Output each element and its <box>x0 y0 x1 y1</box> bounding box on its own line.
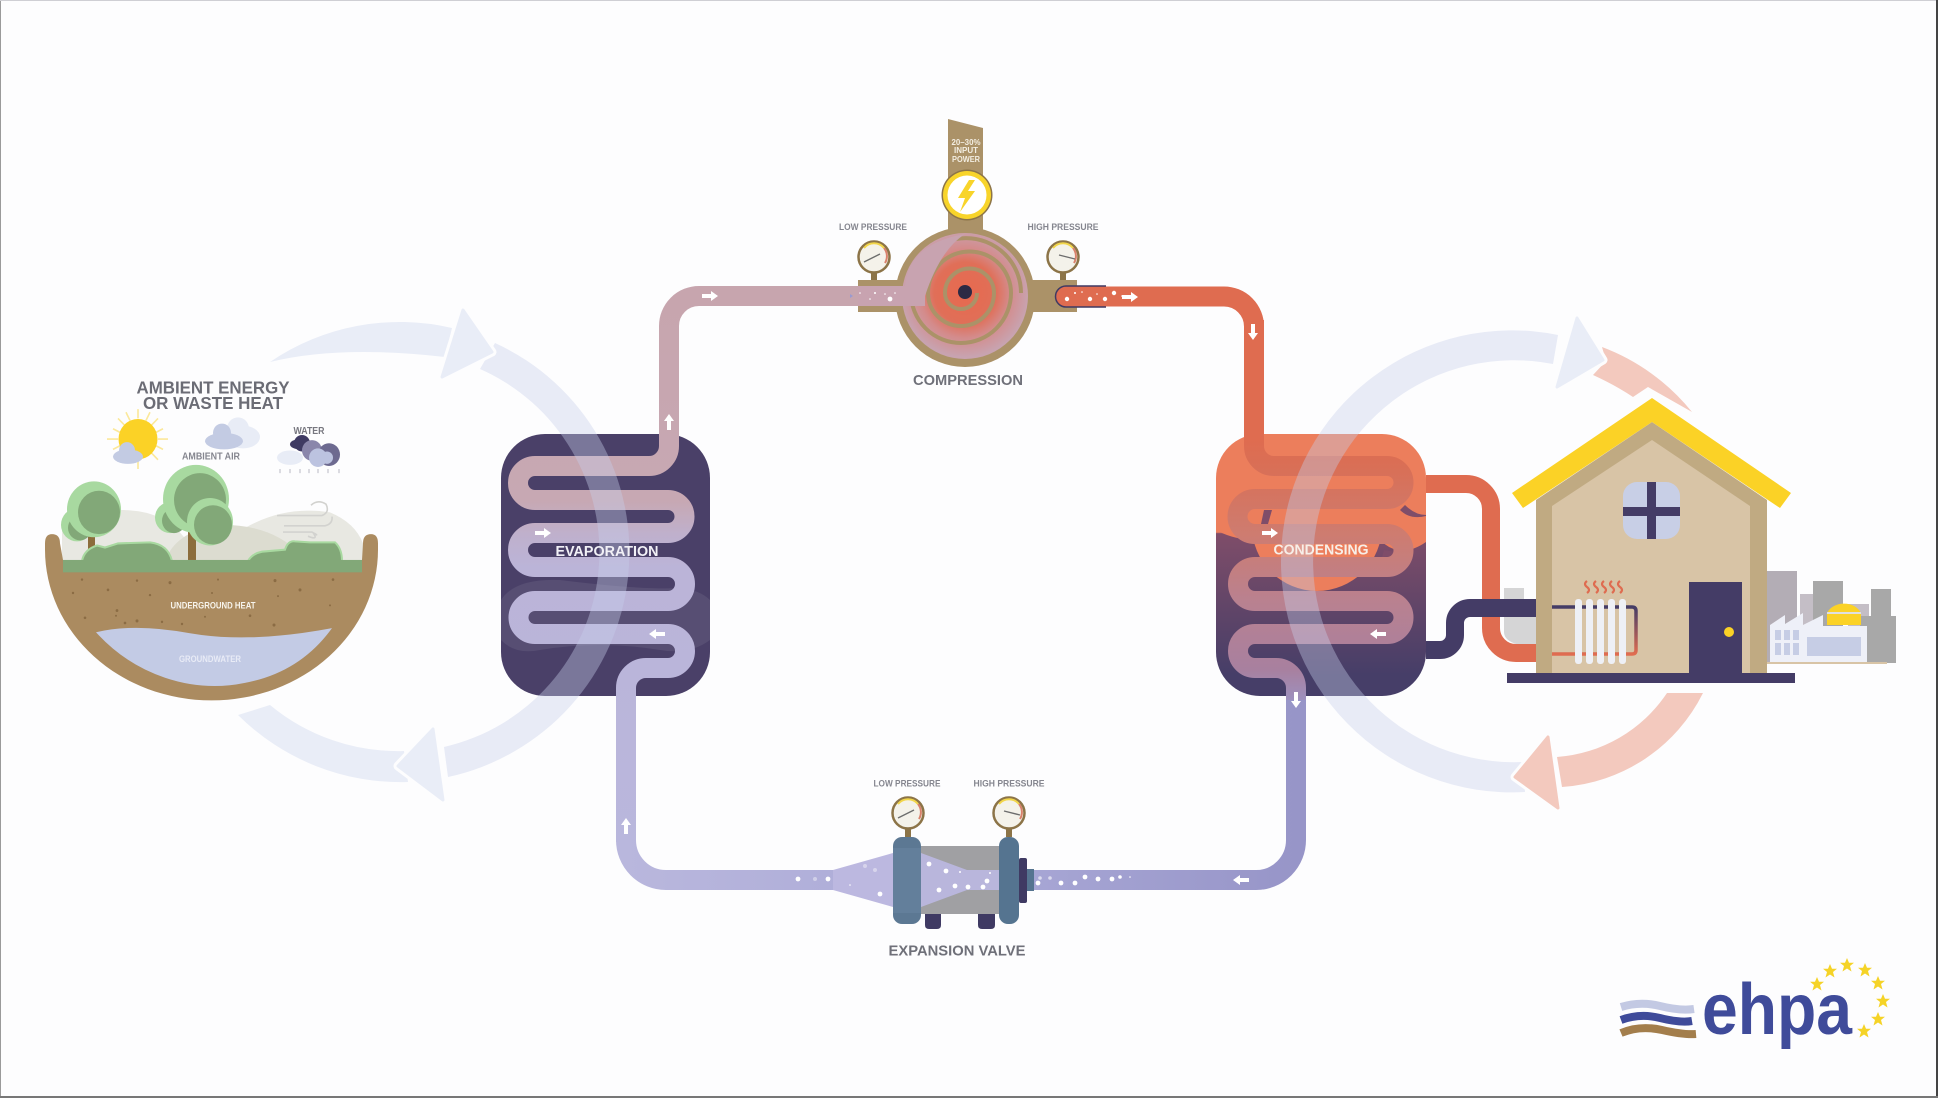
particles on outlet <box>1065 291 1123 301</box>
input power stem <box>948 119 983 235</box>
label: input power: POWER <box>952 155 980 164</box>
inner cone <box>921 853 999 907</box>
feet <box>925 914 995 929</box>
cloud: water <box>277 435 340 473</box>
left cylinder <box>893 837 921 924</box>
power meter <box>942 170 992 220</box>
soil specks <box>72 578 334 627</box>
house wall <box>1536 422 1767 673</box>
arrowhead: pink lower <box>1515 737 1558 808</box>
label: input power: 20–30% <box>952 138 980 147</box>
heat flow arrows: left ring <box>238 310 629 800</box>
inlet pipe <box>858 286 925 306</box>
bushes <box>82 541 342 561</box>
label: low pressure (compressor): LOW PRESSURE <box>839 222 907 233</box>
label: high pressure (compressor): HIGH PRESSURE <box>1028 222 1098 233</box>
label: high pressure (valve): HIGH PRESSURE <box>974 778 1044 790</box>
label: compression: COMPRESSION <box>913 372 1023 389</box>
pipe: evaporator coil <box>518 296 905 842</box>
roof <box>1512 398 1791 508</box>
floor <box>1507 673 1795 683</box>
radiator <box>1575 599 1626 664</box>
label: low pressure (valve): LOW PRESSURE <box>874 778 940 790</box>
gauge: valve low pressure <box>892 798 924 837</box>
panel: expansion valve <box>796 837 1131 929</box>
sun <box>107 409 168 469</box>
label: underground heat: UNDERGROUND HEAT <box>170 600 256 611</box>
hills <box>62 510 363 561</box>
tree middle <box>155 465 233 564</box>
cloud: ambient air <box>205 417 260 449</box>
groundwater <box>96 628 332 686</box>
inlet particles <box>850 292 896 301</box>
wind lines <box>277 502 332 538</box>
gauge: valve high pressure <box>994 798 1024 837</box>
outer cone <box>833 853 893 907</box>
pipe: condenser coil <box>1238 320 1404 700</box>
panel: condenser box <box>1216 434 1426 696</box>
nozzle <box>1019 858 1027 903</box>
inlet band <box>905 234 965 300</box>
right cylinder <box>999 837 1019 924</box>
grey tank <box>1504 588 1536 644</box>
heat flow arrows: right ring blue <box>1281 318 1603 792</box>
gauge: compressor high pressure <box>1048 242 1078 280</box>
grass strip <box>63 560 362 572</box>
panel: ambient energy bowl <box>45 377 378 700</box>
logo wordmark: ehpa <box>1702 970 1853 1050</box>
door <box>1689 582 1742 675</box>
label: ambient air: AMBIENT AIR <box>182 452 240 463</box>
city and factory <box>1767 571 1896 664</box>
label: expansion valve: EXPANSION VALVE <box>888 942 1026 960</box>
valve particles <box>796 862 1131 896</box>
label: evaporation: EVAPORATION <box>556 544 658 560</box>
compressor casing <box>895 227 1035 367</box>
pipes to house: coral flow <box>1426 484 1536 653</box>
heat flow arrows: right ring pink <box>1557 347 1703 787</box>
label: water: WATER <box>293 426 325 437</box>
panel: compressor <box>850 119 1106 367</box>
EU stars <box>1810 958 1890 1038</box>
valve body <box>921 846 999 914</box>
label: condensing: CONDENSING <box>1274 542 1368 558</box>
heat waves <box>1585 581 1622 593</box>
centre shaft <box>958 285 972 299</box>
radiator pipe <box>1552 607 1636 654</box>
title: AMBIENT ENERGY <box>136 377 290 398</box>
gauge: compressor low pressure <box>858 242 890 280</box>
logo waves <box>1621 1004 1696 1034</box>
label: input power: INPUT <box>954 146 978 155</box>
flow arrows <box>535 291 1386 885</box>
outlet pipe <box>1056 286 1106 307</box>
flanges <box>858 280 1077 312</box>
panel: evaporator box <box>501 434 710 696</box>
label: input power <box>952 138 980 164</box>
title: OR WASTE HEAT <box>143 393 283 413</box>
tree left <box>61 481 121 567</box>
house interior <box>1552 440 1750 673</box>
pipe: dark return <box>1426 608 1536 650</box>
panel: house <box>1507 398 1795 683</box>
pipe: hot line top <box>1090 296 1254 330</box>
pipe: bottom run <box>626 690 1296 880</box>
title <box>136 377 290 413</box>
bowl soil <box>45 534 378 700</box>
window <box>1623 482 1680 539</box>
spiral scroll <box>911 238 1021 343</box>
logo: ehpa <box>1621 958 1890 1050</box>
label: groundwater: GROUNDWATER <box>179 654 241 664</box>
